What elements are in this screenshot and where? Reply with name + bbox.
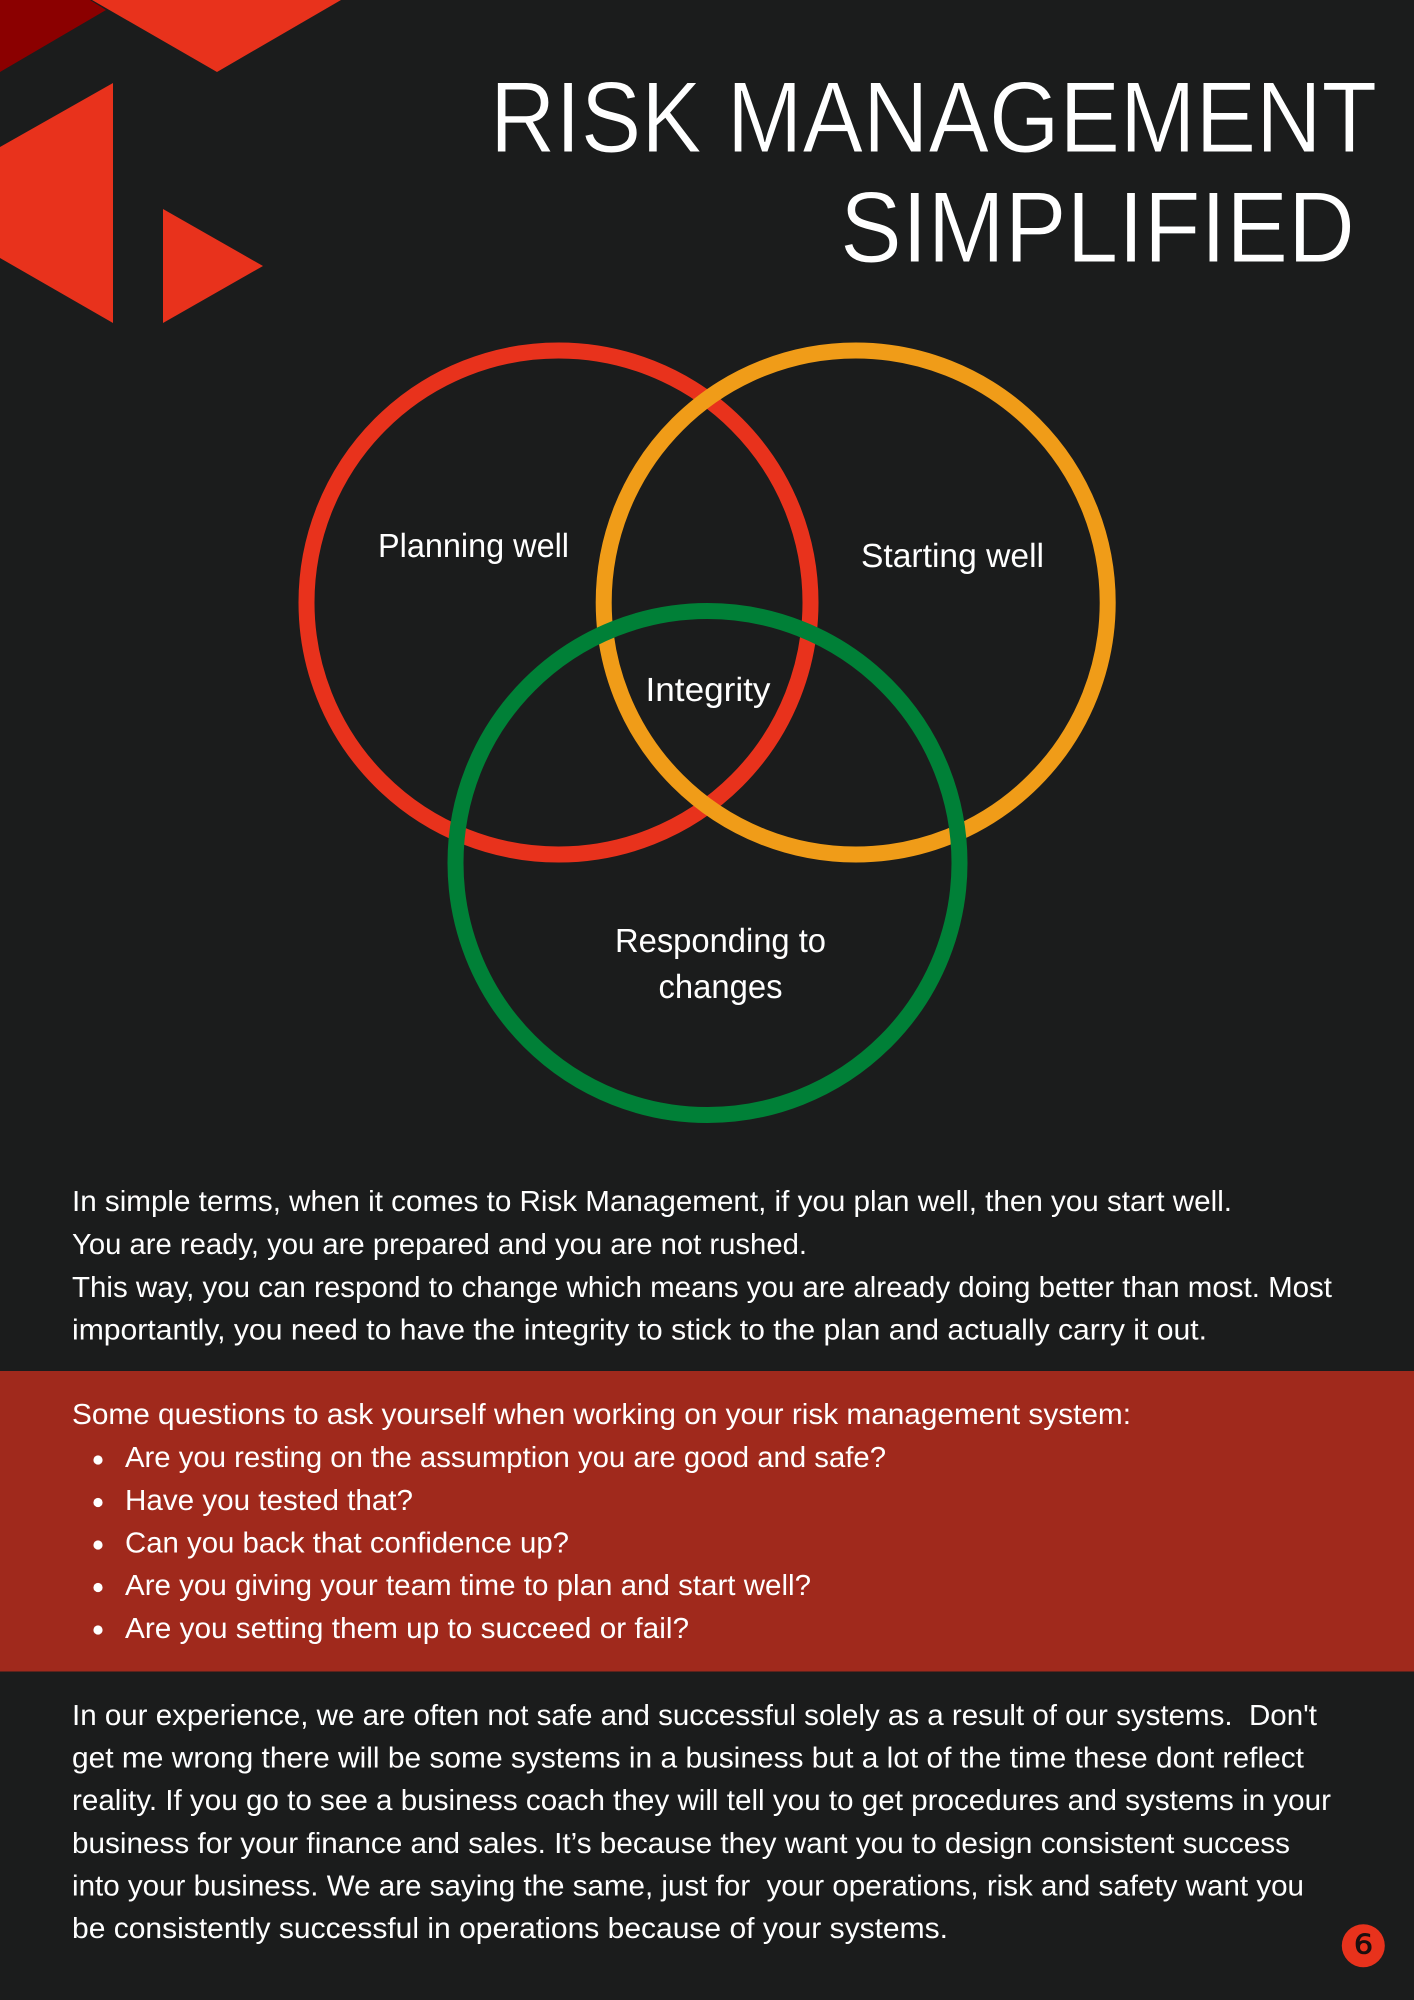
- circle: planning well: [306, 350, 810, 854]
- closing paragraph: In our experience, we are often not safe and successful solely as a result of our systems. Don't: [72, 1700, 1317, 1732]
- questions intro: Some questions to ask yourself when working on your risk management system:: [72, 1399, 1131, 1431]
- question 2: Have you tested that?: [125, 1485, 413, 1517]
- question 4: Are you giving your team time to plan and start well?: [125, 1570, 811, 1602]
- label: starting well: Starting well: [861, 538, 1044, 575]
- closing paragraph: be consistently successful in operations because of your systems.: [72, 1913, 948, 1945]
- question 1: Are you resting on the assumption you are good and safe?: [125, 1442, 886, 1474]
- intro paragraph: This way, you can respond to change which means you are already doing better than most. Most: [72, 1272, 1332, 1304]
- label: responding to changes: changes: [658, 969, 782, 1006]
- circle: responding to changes: [456, 611, 960, 1115]
- closing paragraph: business for your finance and sales. It’s because they want you to design consistent success: [72, 1828, 1290, 1860]
- intro paragraph: importantly, you need to have the integrity to stick to the plan and actually carry it out.: [72, 1314, 1207, 1346]
- intro paragraph: You are ready, you are prepared and you are not rushed.: [72, 1229, 807, 1261]
- page number badge: 6: [1354, 1930, 1373, 1960]
- closing paragraph: into your business. We are saying the same, just for your operations, risk and safety want you: [72, 1870, 1304, 1902]
- label: responding to changes: Responding to: [615, 923, 826, 960]
- intro paragraph: In simple terms, when it comes to Risk Management, if you plan well, then you start well.: [72, 1186, 1232, 1218]
- panel: questions: [0, 1371, 1414, 1672]
- closing paragraph: [72, 1700, 1331, 1945]
- page number badge: [1342, 1924, 1385, 1967]
- question 3: Can you back that confidence up?: [125, 1528, 569, 1560]
- intro paragraph: [72, 1186, 1332, 1346]
- closing paragraph: get me wrong there will be some systems in a business but a lot of the time these dont reflect: [72, 1742, 1304, 1774]
- circle: starting well: [604, 350, 1108, 854]
- label: responding to changes: [615, 923, 826, 1006]
- title: SIMPLIFIED: [840, 172, 1355, 284]
- label: integrity: Integrity: [646, 672, 771, 709]
- label: planning well: Planning well: [378, 528, 569, 565]
- decorative corner triangles: [0, 0, 341, 323]
- question 5: Are you setting them up to succeed or fail?: [125, 1613, 689, 1645]
- closing paragraph: reality. If you go to see a business coach they will tell you to get procedures and systems in your: [72, 1785, 1331, 1817]
- venn diagram: [306, 350, 1108, 1115]
- title: [490, 62, 1377, 284]
